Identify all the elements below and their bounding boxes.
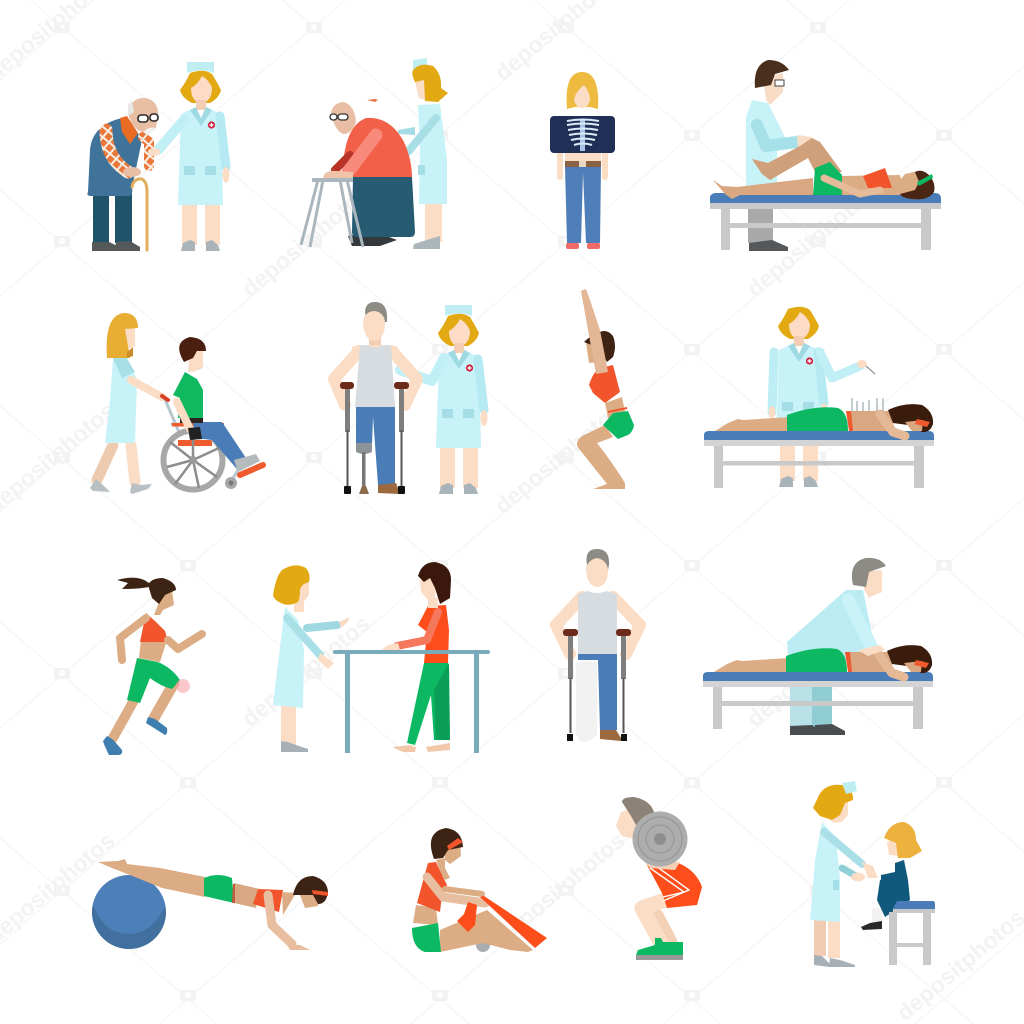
scene: runner with sore knee	[103, 578, 202, 755]
scene: acupuncture treatment	[704, 307, 934, 488]
scene: woman squatting with raised arms	[577, 289, 634, 489]
body	[556, 591, 640, 742]
scene: doctor bending patient's knee on couch	[710, 60, 941, 251]
seated man	[173, 337, 260, 472]
exercise ball	[92, 875, 166, 949]
scene: plank on exercise ball	[92, 859, 328, 950]
scene: elderly woman with walker and nurse	[301, 58, 448, 249]
left crutch	[340, 382, 354, 494]
patient	[713, 138, 934, 199]
scene: seated stretch with band	[412, 828, 547, 952]
sore knee glow	[176, 679, 190, 693]
woman walking	[380, 562, 451, 752]
nurse	[400, 305, 488, 494]
therapist	[768, 307, 875, 487]
legs	[103, 683, 174, 755]
watermark text: depositphotos	[490, 397, 628, 519]
therapist	[787, 558, 886, 735]
arms	[120, 618, 202, 660]
x-ray plate	[550, 116, 615, 153]
woman	[98, 859, 328, 950]
couch	[703, 672, 933, 729]
scene: back massage	[703, 558, 933, 735]
shoes	[636, 938, 683, 960]
watermark text: depositphotos	[237, 180, 375, 302]
amputee man	[334, 302, 417, 494]
nurse	[810, 781, 878, 967]
therapist hands	[858, 645, 885, 656]
watermark text: depositphotos	[237, 610, 375, 732]
legs	[642, 900, 672, 945]
watermark text: depositphotos	[492, 827, 630, 949]
couch	[704, 431, 934, 488]
stool	[889, 901, 935, 965]
watermark text: depositphotos	[742, 610, 880, 732]
therapist	[273, 565, 350, 752]
scene: old man with cane and nurse	[87, 62, 229, 251]
legs	[577, 425, 625, 489]
prone patient	[715, 404, 933, 436]
wheelchair	[162, 396, 263, 490]
left crutch	[563, 629, 578, 741]
nurse	[90, 313, 162, 494]
resistance band	[457, 896, 547, 948]
torso and clothing	[589, 365, 634, 439]
torso	[139, 613, 168, 662]
couch	[710, 193, 941, 250]
right crutch	[616, 629, 631, 741]
scene: amputee on crutches and nurse	[334, 302, 488, 494]
massage ball	[476, 938, 490, 952]
child	[861, 822, 922, 930]
small orange mark	[367, 99, 378, 102]
scene: woman with x-ray	[550, 72, 615, 249]
nurse	[148, 62, 230, 251]
hair and face	[567, 72, 598, 109]
elderly woman	[323, 102, 415, 246]
nurse from behind	[391, 58, 448, 249]
scene: man on crutches with leg cast	[556, 549, 640, 742]
head	[584, 331, 615, 363]
head with ponytail	[117, 578, 176, 615]
walking frame	[301, 180, 363, 247]
shorts	[127, 658, 180, 703]
shorts	[647, 863, 702, 908]
body	[557, 150, 608, 249]
woman	[412, 828, 533, 952]
weight plate	[632, 812, 688, 866]
raised arm	[581, 289, 608, 374]
scene: therapist and patient at parallel bars	[273, 562, 490, 753]
scene: nurse treating child on stool	[810, 781, 935, 967]
scene: squat with weight plate	[616, 797, 702, 960]
needles	[852, 398, 883, 411]
right crutch	[394, 382, 409, 494]
doctor	[746, 60, 813, 251]
head	[586, 549, 609, 587]
scene: nurse pushing man in wheelchair	[90, 313, 263, 494]
prone patient	[714, 645, 932, 677]
old man	[87, 98, 158, 251]
head and torso	[616, 797, 680, 870]
parallel bars	[333, 650, 490, 753]
watermark text: depositphotos	[742, 180, 880, 302]
